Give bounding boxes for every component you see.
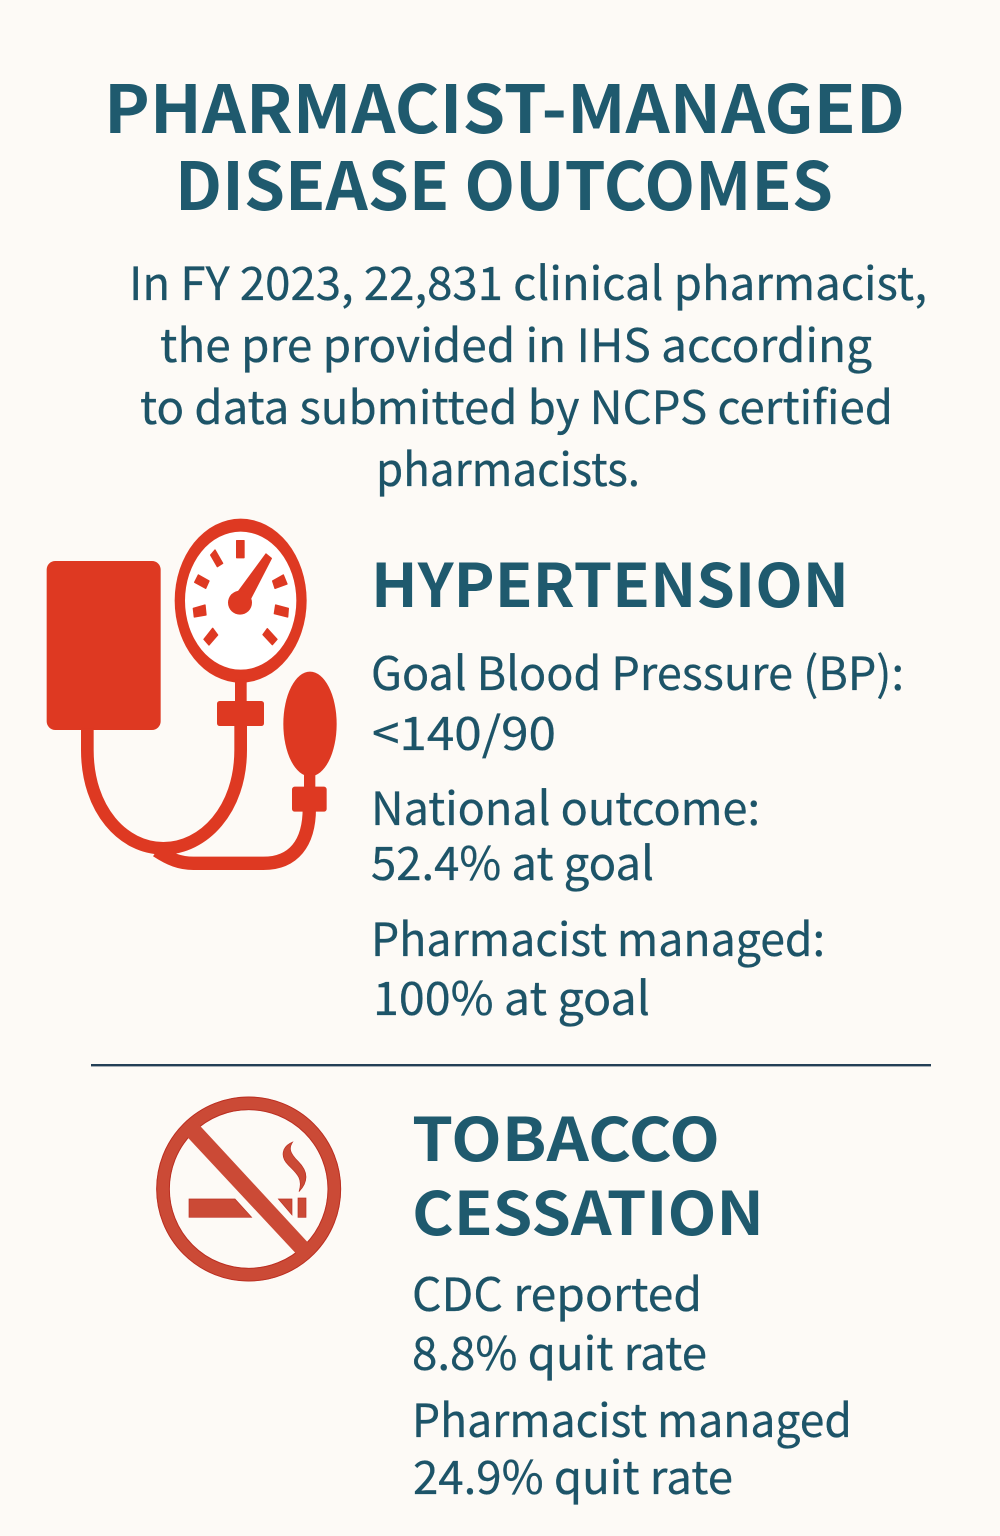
text: pharmacist managed outcome: Pharmacist managed: bbox=[371, 904, 825, 970]
text: goal blood pressure: Goal Blood Pressure (BP): bbox=[371, 638, 904, 704]
heading: hypertension: HYPERTENSION bbox=[371, 538, 849, 625]
title: PHARMACIST-MANAGED bbox=[104, 57, 905, 153]
heading: tobacco cessation: TOBACCO bbox=[412, 1092, 720, 1179]
text: pharmacist managed quit rate bbox=[412, 1385, 852, 1508]
icon: no smoking bbox=[157, 1097, 341, 1281]
intro text block: to data submitted by NCPS certified bbox=[140, 372, 893, 438]
text: pharmacist managed quit rate: Pharmacist managed bbox=[412, 1385, 852, 1451]
text: cdc reported: CDC reported bbox=[412, 1259, 702, 1325]
text: national outcome: 52.4% at goal bbox=[371, 828, 654, 894]
heading: tobacco cessation: CESSATION bbox=[412, 1166, 764, 1253]
panel: hypertension bbox=[371, 538, 904, 1029]
text: pharmacist managed outcome: 100% at goal bbox=[373, 963, 650, 1029]
icon: blood pressure monitor bbox=[47, 519, 337, 863]
text: pharmacist managed outcome bbox=[371, 904, 825, 1029]
title: DISEASE OUTCOMES bbox=[175, 134, 833, 230]
text: goal blood pressure bbox=[371, 638, 904, 764]
text: goal blood pressure: <140/90 bbox=[372, 698, 556, 764]
intro text block bbox=[129, 248, 927, 500]
intro text block: the pre provided in IHS according bbox=[160, 310, 872, 376]
heading: tobacco cessation bbox=[412, 1092, 764, 1253]
panel: tobacco cessation bbox=[412, 1092, 852, 1508]
title bbox=[104, 57, 905, 230]
text: cdc reported bbox=[412, 1259, 707, 1384]
intro text block: pharmacists. bbox=[376, 434, 640, 500]
text: national outcome bbox=[371, 773, 760, 894]
text: cdc reported: 8.8% quit rate bbox=[412, 1318, 707, 1384]
intro text block: In FY 2023, 22,831 clinical pharmacist, bbox=[129, 248, 927, 314]
text: national outcome: National outcome: bbox=[371, 773, 760, 839]
text: pharmacist managed quit rate: 24.9% quit rate bbox=[413, 1442, 733, 1508]
